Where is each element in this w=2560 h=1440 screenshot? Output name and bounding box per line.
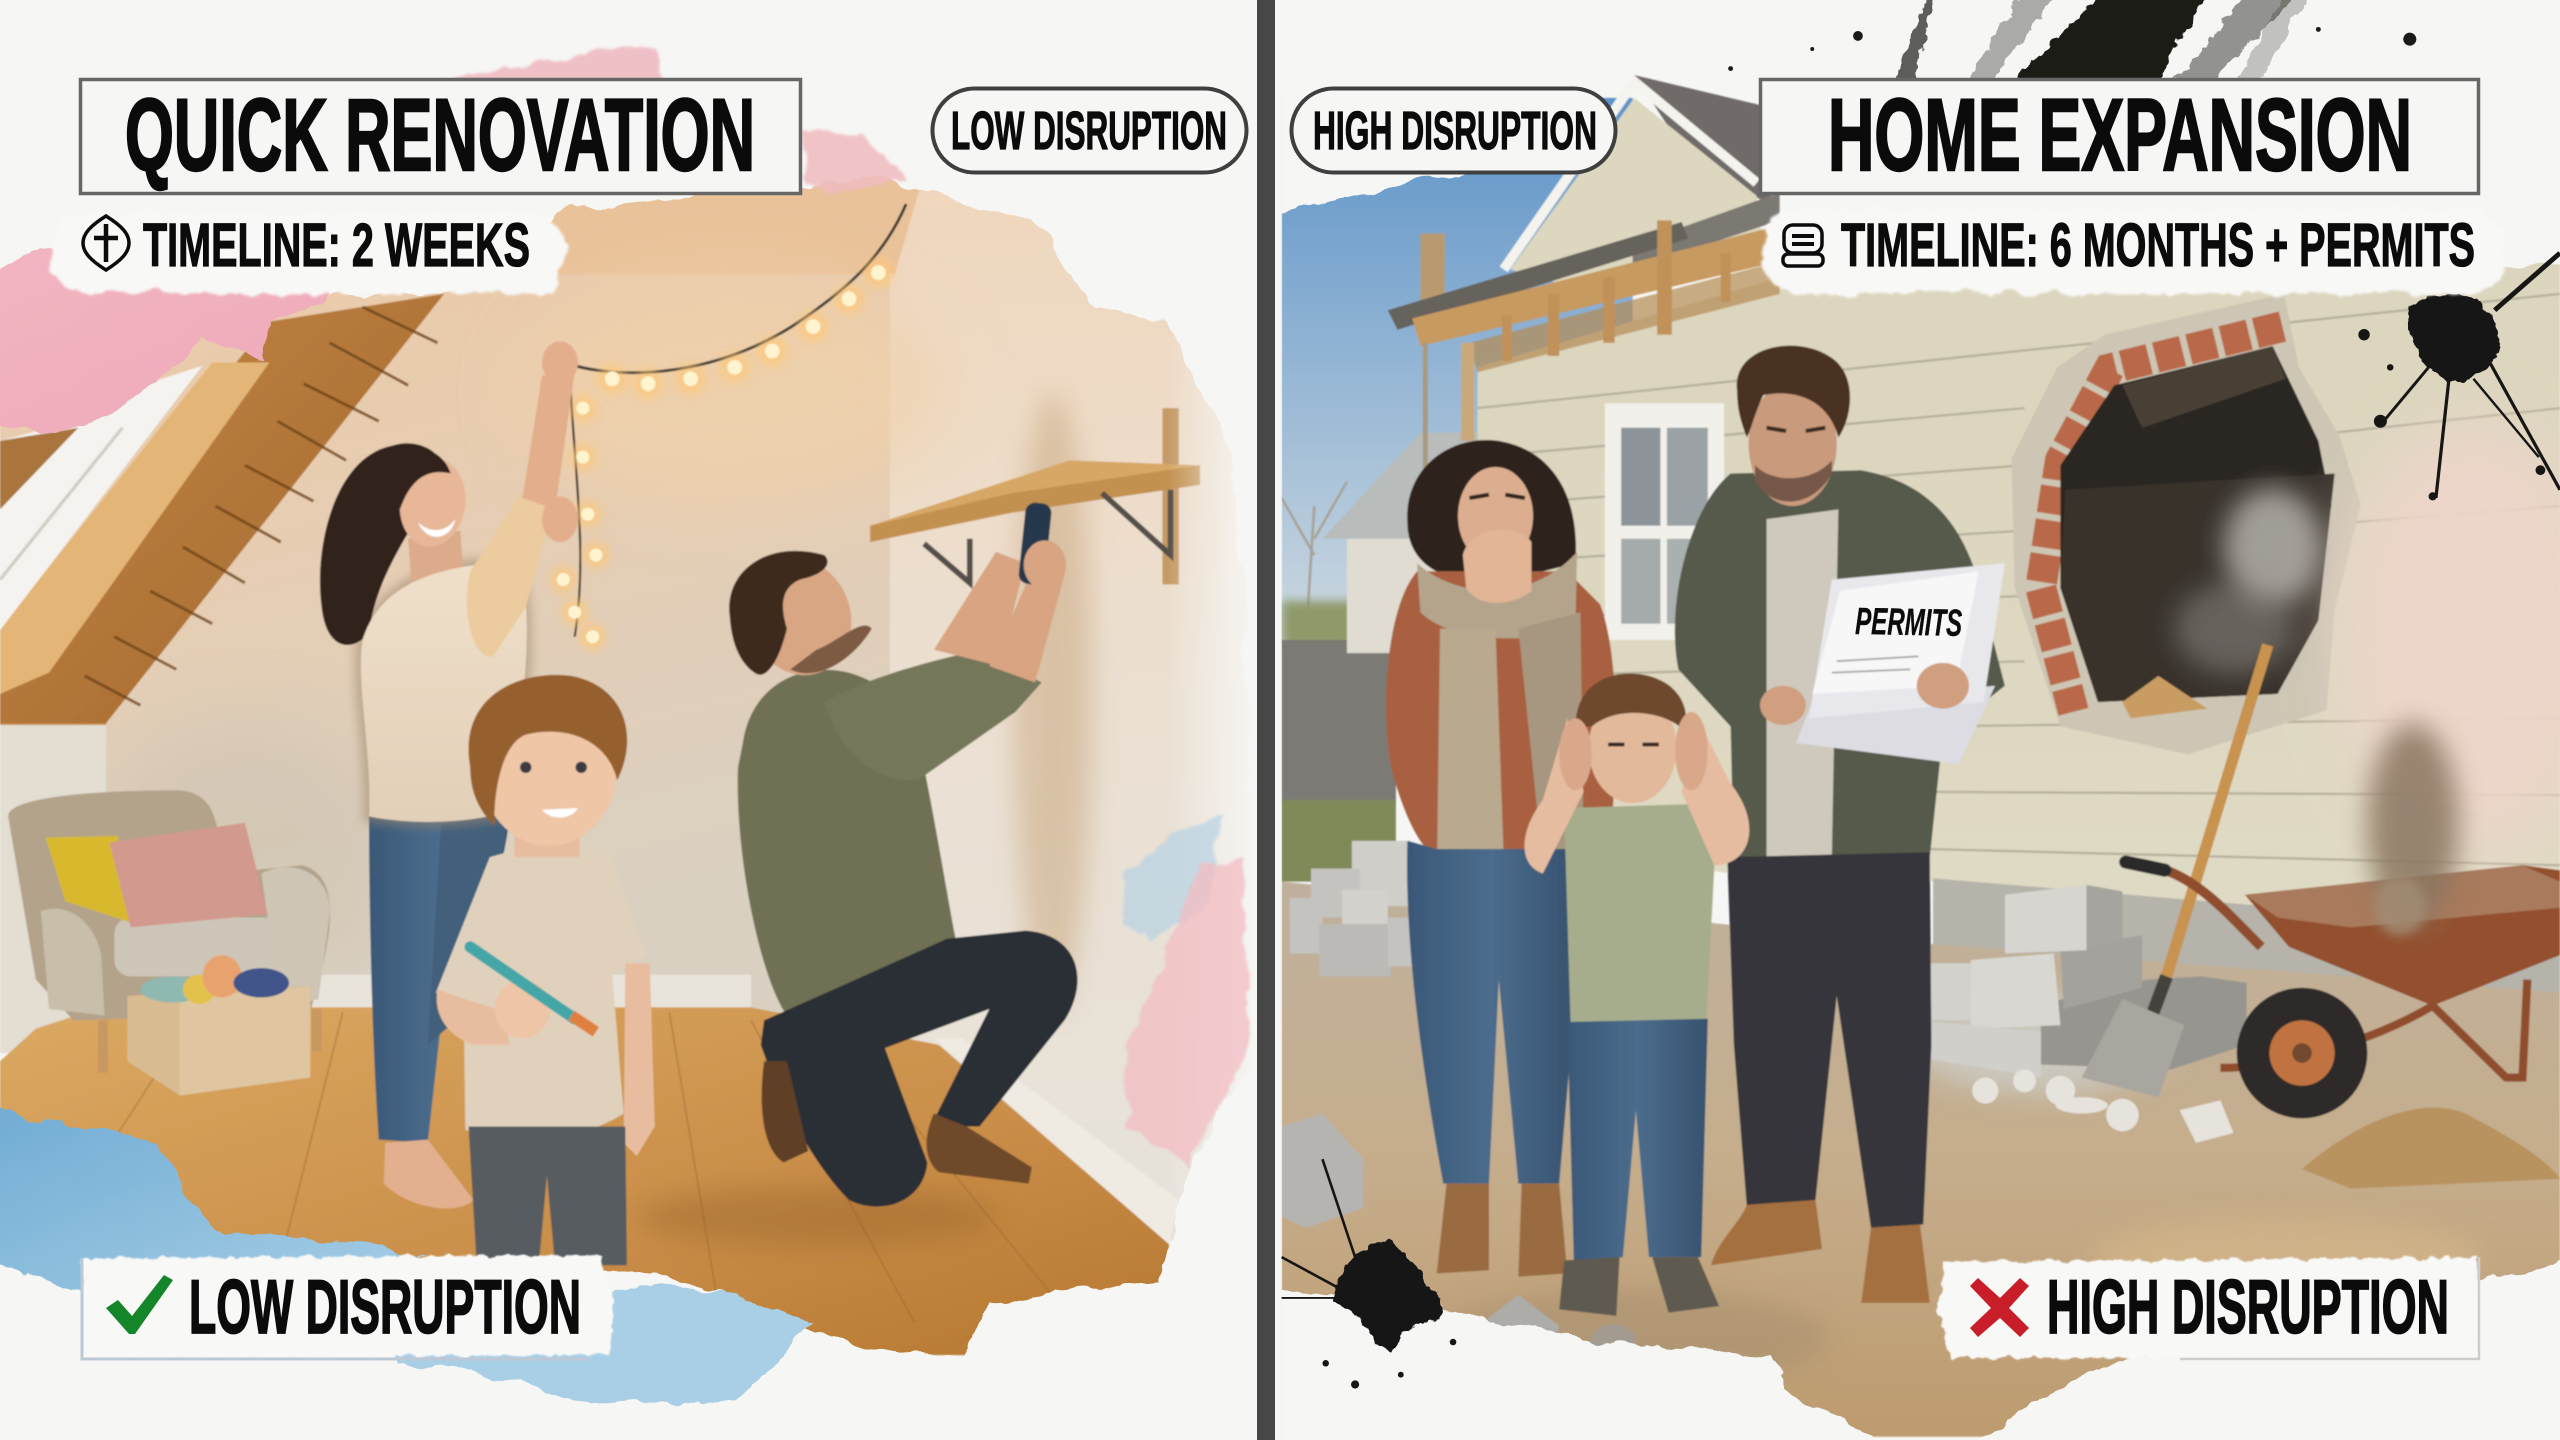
title: quick renovation bbox=[80, 78, 800, 194]
ground bbox=[1282, 882, 2560, 1437]
label backing: left timeline bbox=[52, 212, 565, 294]
panel: quick renovation scene bbox=[0, 147, 1257, 1355]
armchair with cushions and toy box bbox=[8, 790, 330, 1096]
skylight and sloped wood panel bbox=[0, 294, 444, 723]
house window bbox=[1605, 403, 1724, 640]
woman covering her nose bbox=[1386, 440, 1616, 1277]
boy covering his ears bbox=[1524, 673, 1749, 1316]
wood floor bbox=[0, 1007, 1179, 1355]
document label: permits: PERMITS bbox=[1855, 601, 1963, 645]
label backing: right timeline bbox=[1763, 209, 2504, 294]
callout: low disruption: LOW DISRUPTION bbox=[189, 1265, 581, 1350]
concrete block stack bbox=[1923, 885, 2247, 1143]
watercolor washes on the left bbox=[0, 46, 1249, 1404]
wash: blue bottom centre bbox=[392, 1290, 813, 1404]
wash: pink right bbox=[1127, 857, 1249, 1167]
woman hanging lights bbox=[320, 341, 578, 1208]
pink dust haze bbox=[2343, 424, 2560, 849]
attic room wall and ceiling bbox=[0, 147, 1257, 1241]
house siding bbox=[1478, 253, 2560, 1020]
string lights bbox=[550, 204, 906, 650]
divider between panels bbox=[1257, 0, 1275, 1440]
shelf and brackets bbox=[870, 408, 1200, 584]
sky bbox=[1282, 98, 1633, 669]
pill: low disruption bbox=[932, 88, 1246, 172]
title: quick renovation: QUICK RENOVATION bbox=[125, 78, 755, 192]
panel: home expansion scene bbox=[1282, 75, 2560, 1437]
wash: blue right bbox=[1123, 816, 1221, 939]
wash: pink top left bbox=[0, 248, 327, 431]
house side wing bbox=[1322, 433, 1486, 653]
pill: high disruption: HIGH DISRUPTION bbox=[1313, 101, 1597, 161]
callout: high disruption bbox=[1938, 1257, 2480, 1359]
man fixing the shelf bbox=[729, 502, 1078, 1207]
paper mask around right scene bbox=[1241, 0, 2560, 1440]
icon: green check bbox=[106, 1275, 173, 1334]
icon: clock cross bbox=[83, 216, 129, 270]
timeline: 2 weeks bbox=[83, 211, 530, 279]
man reading permits bbox=[1675, 346, 2005, 1303]
pill: low disruption: LOW DISRUPTION bbox=[951, 101, 1227, 161]
ink splatter: top bbox=[1728, 0, 2416, 92]
exposed eave framing and chimney bbox=[1388, 220, 1780, 490]
pill: high disruption bbox=[1292, 88, 1616, 172]
broken block and rocks at front bbox=[1282, 1113, 1636, 1375]
wash: pink top edge bbox=[389, 46, 669, 118]
callout: low disruption bbox=[82, 1255, 614, 1359]
concrete blocks at left bbox=[1290, 841, 1417, 976]
gable dormer and roof bbox=[1504, 75, 1780, 286]
icon: red cross bbox=[1970, 1278, 2029, 1337]
timeline: 2 weeks: TIMELINE: 2 WEEKS bbox=[143, 211, 530, 279]
wash: pink right of title bbox=[803, 131, 908, 193]
ink splatter: right bbox=[2358, 253, 2560, 500]
sand and dust column bbox=[2302, 723, 2560, 1189]
paper mask around left scene bbox=[0, 0, 1322, 1440]
ink splatter: bottom left bbox=[1282, 1159, 1456, 1389]
wash: blue bottom left bbox=[0, 1097, 424, 1290]
boy holding crayon bbox=[436, 675, 655, 1265]
bare tree and distant fence bbox=[1282, 482, 1396, 882]
icon: document stack bbox=[1783, 225, 1823, 266]
wheelbarrow bbox=[2126, 862, 2560, 1118]
shovel bbox=[2082, 645, 2268, 1097]
ragged hole in wall bbox=[2011, 294, 2361, 754]
